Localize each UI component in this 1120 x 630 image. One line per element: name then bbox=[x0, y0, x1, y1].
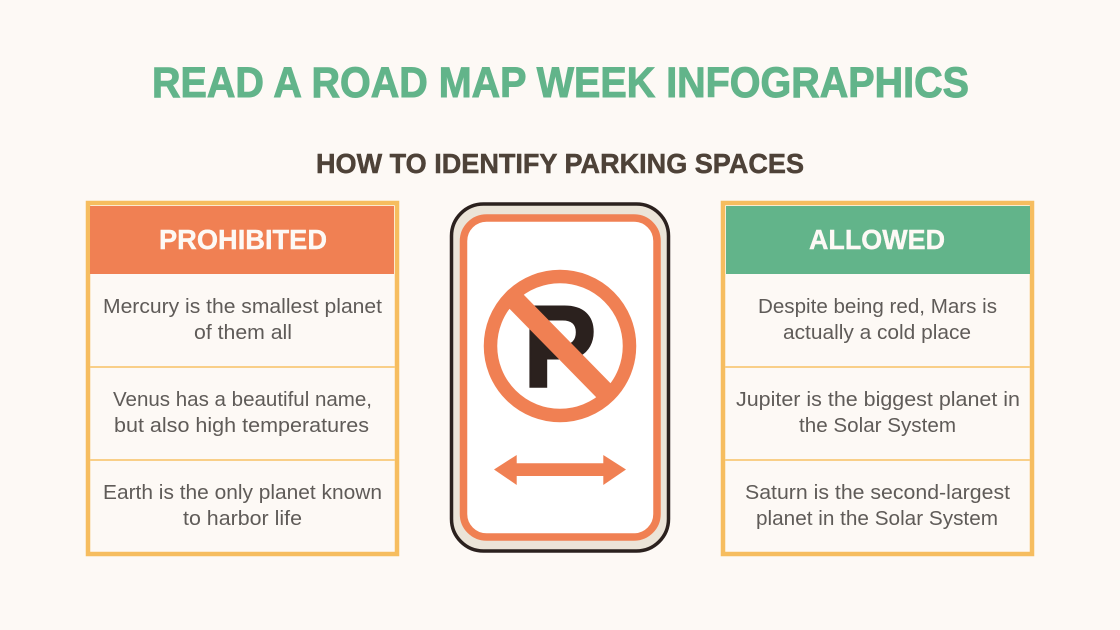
panel: prohibited bbox=[88, 203, 397, 554]
text: jupiter: the Solar System bbox=[799, 415, 956, 437]
text: venus: Venus has a beautiful name, bbox=[113, 389, 372, 411]
text: mars: actually a cold place bbox=[783, 322, 971, 344]
text: jupiter: Jupiter is the biggest planet in bbox=[736, 389, 1020, 411]
text: venus bbox=[113, 389, 372, 437]
text: saturn: Saturn is the second-largest bbox=[745, 482, 1010, 504]
text: mercury: Mercury is the smallest planet bbox=[103, 296, 382, 318]
text: mercury: of them all bbox=[194, 322, 292, 344]
text: mercury bbox=[103, 296, 382, 344]
prohibited header bbox=[90, 206, 394, 274]
panel: allowed bbox=[723, 203, 1032, 554]
text: earth: to harbor life bbox=[183, 508, 302, 530]
icon: no parking sign bbox=[452, 204, 668, 551]
letter P: P bbox=[523, 282, 597, 411]
text: earth: Earth is the only planet known bbox=[103, 482, 382, 504]
text: mars: Despite being red, Mars is bbox=[758, 296, 997, 318]
text: mars bbox=[758, 296, 997, 344]
text: saturn: planet in the Solar System bbox=[756, 508, 998, 530]
title: READ A ROAD MAP WEEK INFOGRAPHICS bbox=[152, 59, 969, 107]
allowed header bbox=[726, 206, 1030, 274]
prohibition circle bbox=[490, 276, 630, 416]
subtitle: HOW TO IDENTIFY PARKING SPACES bbox=[316, 148, 804, 179]
icon: double arrow bbox=[494, 455, 626, 485]
text: saturn bbox=[745, 482, 1010, 530]
text: jupiter bbox=[736, 389, 1020, 437]
prohibited header: PROHIBITED bbox=[159, 224, 327, 255]
allowed header: ALLOWED bbox=[809, 224, 945, 255]
text: venus: but also high temperatures bbox=[114, 415, 369, 437]
text: earth bbox=[103, 482, 382, 530]
